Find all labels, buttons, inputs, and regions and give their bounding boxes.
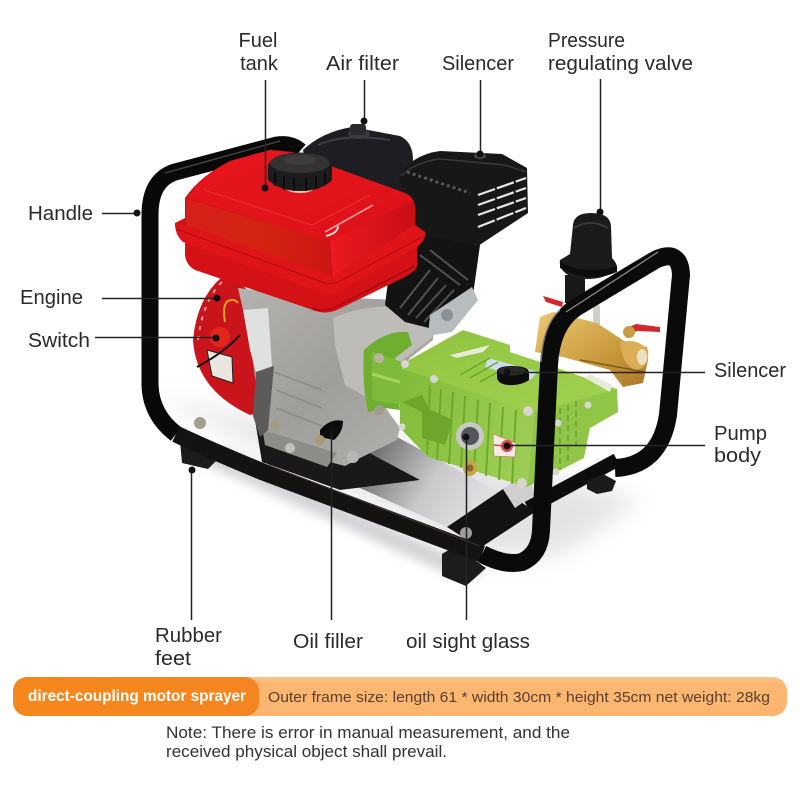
oil cap on pump — [497, 366, 529, 385]
label: silencer top: Silencer — [442, 53, 514, 75]
fuel cap — [268, 152, 332, 193]
measurement note: Note: There is error in manual measurement, and the — [166, 724, 570, 742]
label: handle: Handle — [28, 203, 93, 225]
engine flywheel — [193, 277, 262, 415]
label: pump body — [504, 423, 767, 467]
size and weight text: Outer frame size: length 61 * width 30cm * height 35cm net weight: 28kg — [268, 689, 770, 706]
label: pump body: body — [714, 445, 761, 467]
product name pill — [13, 677, 259, 716]
brass valve body — [535, 312, 660, 387]
label: handle — [28, 203, 140, 225]
pump body — [398, 330, 618, 488]
product name pill: direct-coupling motor sprayer — [28, 688, 246, 705]
label: pressure regulating valve — [548, 30, 693, 216]
label: fuel tank — [239, 30, 279, 192]
rubber foot left — [180, 436, 221, 469]
oil sight glass — [456, 422, 484, 476]
label: rubber feet: Rubber — [155, 625, 222, 647]
measurement note: received physical object shall prevail. — [166, 743, 447, 761]
label: rubber feet — [155, 466, 222, 670]
label: pressure regulating valve: Pressure — [548, 30, 625, 52]
pump coupling — [364, 332, 412, 415]
label: engine: Engine — [20, 287, 83, 309]
label: rubber feet: feet — [155, 648, 191, 670]
label: oil sight glass: oil sight glass — [406, 631, 530, 653]
label: oil filler — [293, 426, 363, 653]
specification bar — [13, 677, 787, 716]
label: oil sight glass — [406, 434, 530, 653]
label: switch — [28, 330, 220, 352]
label: pressure regulating valve: regulating valve — [548, 53, 693, 75]
label: switch: Switch — [28, 330, 90, 352]
ground shadow — [150, 395, 640, 575]
label: oil filler: Oil filler — [293, 631, 363, 653]
fuel tank — [175, 150, 425, 312]
handle frame left — [150, 141, 300, 434]
label: silencer right — [504, 360, 786, 382]
crank case — [238, 288, 433, 467]
handle frame right hoop — [482, 252, 681, 563]
rubber foot right — [442, 546, 486, 586]
label: silencer top — [442, 53, 514, 158]
label: silencer right: Silencer — [714, 360, 786, 382]
air filter — [303, 124, 413, 195]
label: air filter — [326, 53, 399, 124]
label: fuel tank: Fuel — [239, 30, 277, 52]
label: fuel tank: tank — [240, 53, 279, 75]
back frame rail — [528, 460, 617, 508]
base plate — [320, 437, 535, 548]
cylinder fins — [385, 190, 480, 336]
label: pump body: Pump — [714, 423, 767, 445]
silencer cover — [399, 151, 528, 246]
frame bottom rail — [176, 417, 482, 554]
pressure regulating valve — [543, 213, 617, 325]
warning sticker on pump — [493, 434, 516, 457]
label: engine — [20, 287, 220, 309]
measurement note — [166, 724, 570, 761]
label: air filter: Air filter — [326, 53, 399, 75]
sprayer machine — [150, 124, 681, 586]
dark gap under crank case — [255, 420, 420, 490]
